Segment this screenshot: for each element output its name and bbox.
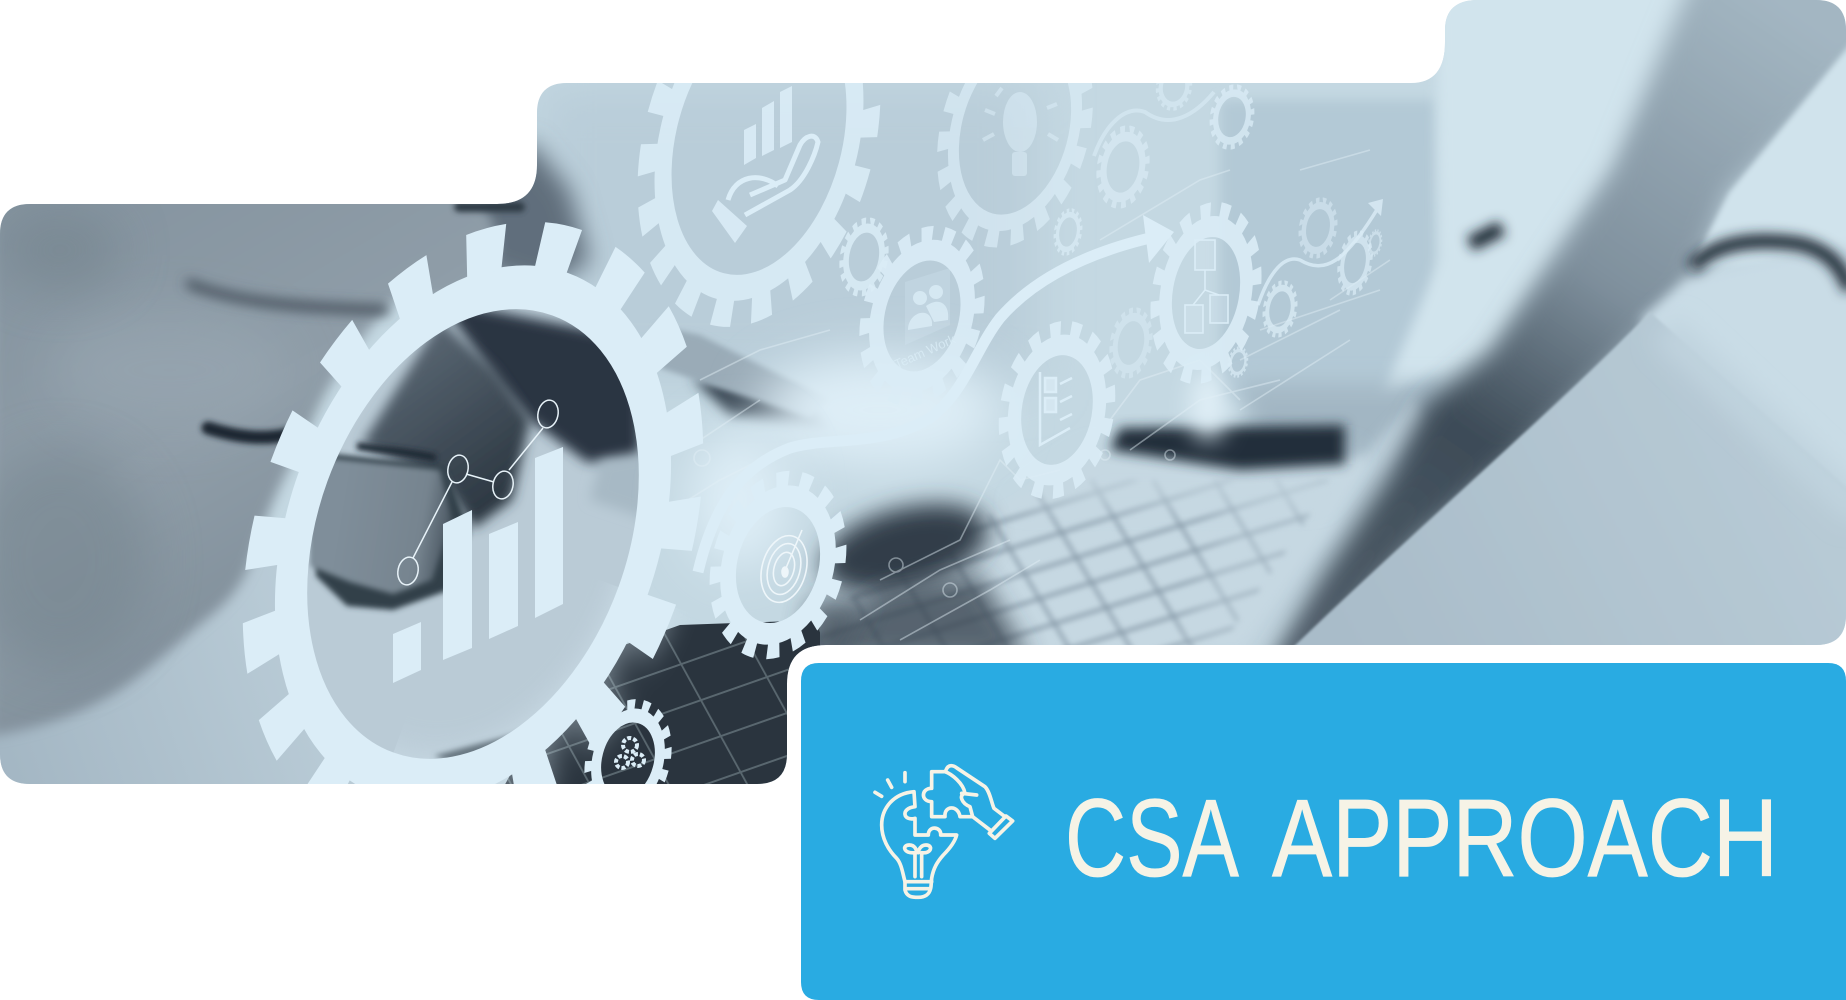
dark keyboard keys xyxy=(505,620,820,784)
title: CSA APPROACH xyxy=(1065,777,1778,900)
gear: faint middle xyxy=(1106,307,1156,379)
main flow arrow xyxy=(698,215,1174,572)
gear: under bulb xyxy=(1052,208,1084,256)
gear: tiny lower xyxy=(1227,346,1249,378)
background cable xyxy=(1470,228,1846,290)
banner background xyxy=(801,663,1846,1000)
icon: light bulb xyxy=(983,88,1058,176)
large gear xyxy=(242,222,703,784)
table surface xyxy=(1285,312,1846,655)
gear: small teal left xyxy=(836,217,892,297)
gear: team work xyxy=(860,226,985,378)
line graph in large gear xyxy=(395,398,561,587)
laptop screen and background blur xyxy=(537,0,1720,470)
gear: upper middle xyxy=(1093,125,1153,209)
dark keyboard shadows xyxy=(800,425,1345,660)
laptop base strip xyxy=(1362,402,1422,472)
gear: checklist xyxy=(999,321,1116,499)
icon: checklist xyxy=(1040,372,1072,445)
hand skin tone variation xyxy=(0,222,172,649)
finger creases xyxy=(190,207,520,437)
gear: pie chart xyxy=(1260,280,1300,338)
blurred keyboard xyxy=(820,451,1362,646)
gear: bottom small xyxy=(576,696,680,824)
icon: team people xyxy=(908,285,948,330)
soft table far edge xyxy=(1673,339,1748,404)
icon: target xyxy=(754,530,814,608)
photo: hand on laptop with gear overlay xyxy=(0,0,1846,784)
photo background wash xyxy=(0,0,1846,800)
gear: growth hand xyxy=(638,83,880,327)
small decorative gears xyxy=(836,63,1383,379)
panel: title banner xyxy=(801,663,1846,1000)
bright background right of lid xyxy=(1690,20,1846,270)
gear: right idea xyxy=(1296,197,1340,259)
fingers inside large gear xyxy=(308,309,639,758)
raised finger near notch xyxy=(470,140,590,290)
bar chart in large gear xyxy=(393,447,563,683)
title: CSA APPROACH: CSA xyxy=(1065,777,1239,900)
circuit lines xyxy=(640,150,1390,640)
label: team work: Team Work xyxy=(892,331,958,372)
gear: top right xyxy=(1207,84,1257,150)
white glow behind flow arrow xyxy=(690,355,1226,570)
pen xyxy=(661,328,818,427)
hand xyxy=(0,190,498,736)
gear: org chart xyxy=(1150,202,1262,384)
icon: org chart xyxy=(1185,240,1228,333)
gear: target xyxy=(697,465,859,665)
icon: hand with chart xyxy=(712,86,818,243)
gear: top edge xyxy=(1154,63,1194,111)
gear: light bulb xyxy=(937,83,1093,248)
icon: light bulb with puzzle piece and hand xyxy=(875,766,1013,897)
lower left table surface xyxy=(0,565,354,784)
desk behind laptop xyxy=(1637,274,1712,327)
top flow line xyxy=(1094,92,1214,156)
laptop lid edge xyxy=(1265,0,1846,670)
secondary flow arrow xyxy=(1258,199,1383,305)
gear: search xyxy=(1335,231,1375,295)
gear: tiny right xyxy=(1367,229,1383,257)
icon: small gears in bottom gear xyxy=(616,738,644,768)
